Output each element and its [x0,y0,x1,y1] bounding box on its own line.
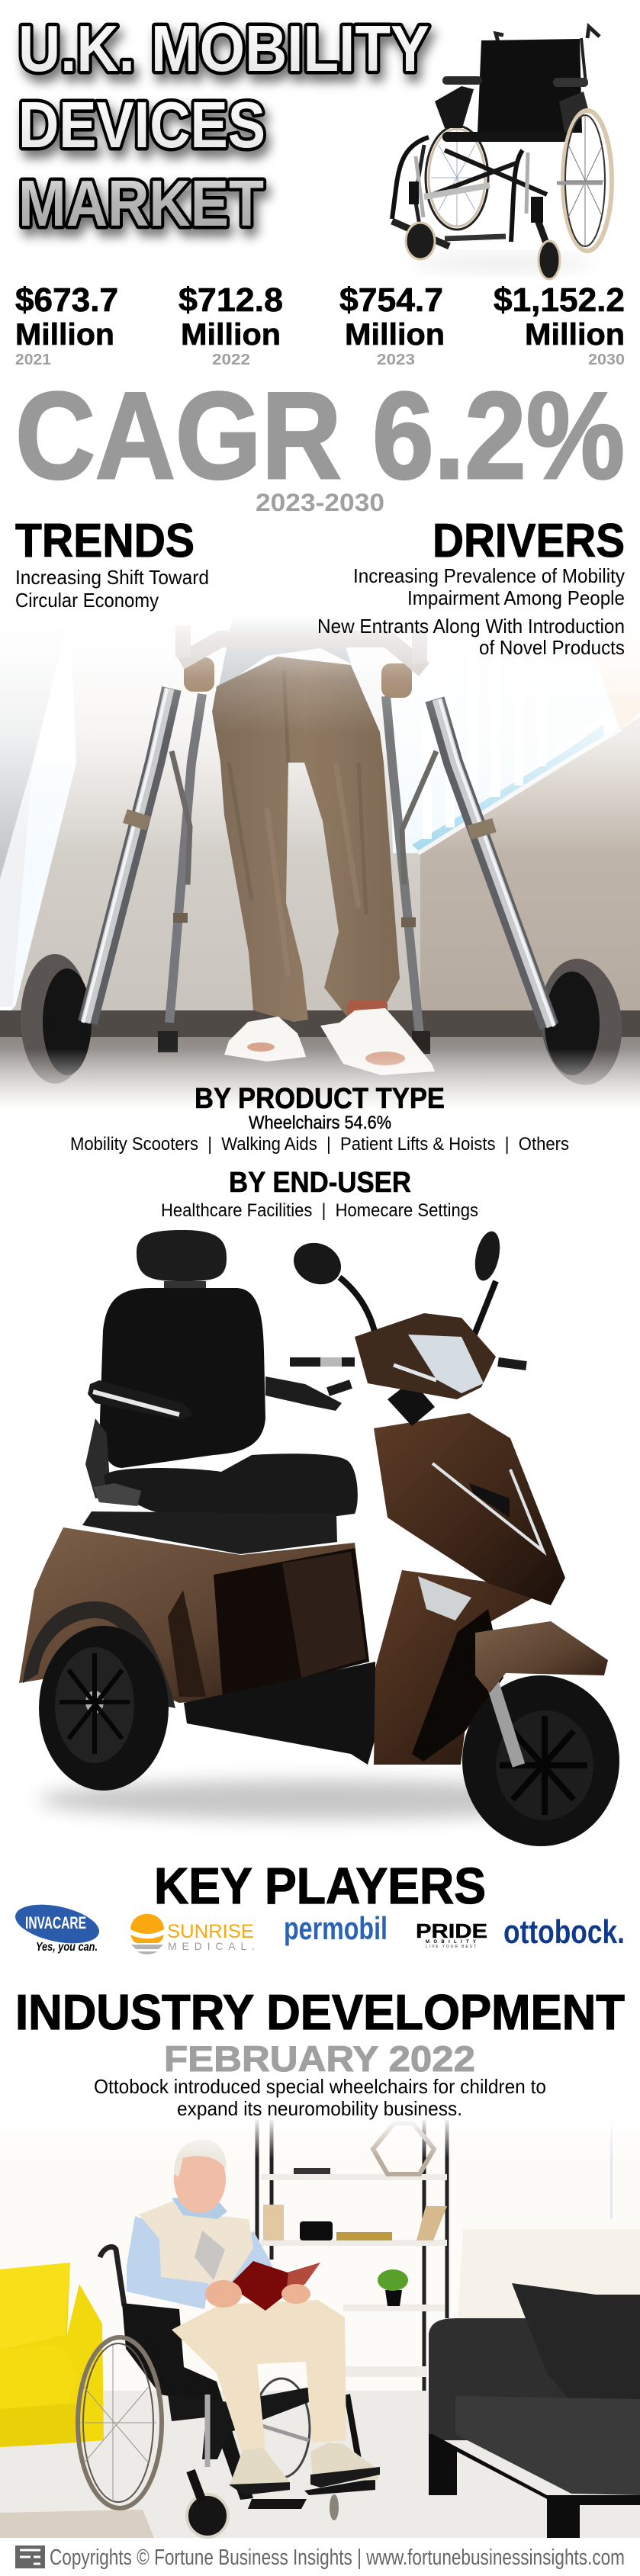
man [127,2140,380,2495]
shirt [217,616,351,690]
heading: key players: KEY PLAYERS [154,1858,486,1915]
development text: Ottobock introduced special wheelchairs for children to [94,2075,546,2098]
logo: invacare: Yes, you can. [36,1941,98,1954]
development text: expand its neuromobility business. [177,2097,462,2120]
front legs [88,689,172,1023]
drivers text: Increasing Prevalence of Mobility [353,564,625,587]
bottom fade [0,1049,640,1113]
wall left [11,616,427,1010]
logo: permobil: permobil [284,1910,388,1946]
floor [0,1037,640,1110]
trends text [15,566,209,612]
title: DEVICES [18,89,265,162]
drivers text [317,564,625,659]
logo: sunrise medical: MEDICAL. [168,1940,255,1952]
scooter leg shield [374,1570,547,1765]
market value 2030: $1,152.2 [494,281,625,319]
floor [0,2391,640,2538]
logo: invacare: INVACARE [25,1913,86,1932]
market value 2023: 2023 [377,352,415,368]
market value 2023: $754.7 [339,281,443,319]
market value 2022: $712.8 [178,281,283,319]
black sofa [429,2283,640,2538]
market value 2022: 2022 [212,352,250,368]
drivers text: of Novel Products [479,636,625,659]
trousers [212,657,400,1022]
scooter front wheel [462,1675,619,1846]
shelving unit [257,2120,447,2391]
title: MARKET [18,168,264,240]
wheel right [535,955,628,1089]
logo: pride mobility [416,1919,487,1949]
scooter front fender [475,1621,608,1693]
subject top fade [0,616,640,732]
development text [94,2075,546,2120]
drivers text: Impairment Among People [407,586,625,609]
window [385,616,640,853]
sock and slippers [347,1001,388,1017]
market value 2030 [494,281,625,368]
footer logo [15,2545,45,2568]
scooter rear body [19,1527,369,1703]
market value 2023 [339,281,445,368]
title: U.K. MOBILITY [18,13,429,85]
heading: drivers: DRIVERS [433,515,625,567]
heading: trends: TRENDS [15,515,195,567]
market value 2021 [15,281,118,368]
market value 2021: 2021 [15,352,51,368]
logo: pride mobility: MOBILITY [426,1940,476,1945]
wheel left [21,954,89,1084]
logo: sunrise medical [130,1914,255,1954]
wheelchair [78,2247,375,2537]
market value 2030: 2030 [588,352,625,368]
market value 2021: Million [15,318,114,352]
drivers text: New Entrants Along With Introduction [317,615,625,638]
hands [184,657,214,692]
photo: man in wheelchair [0,2117,640,2538]
footer [15,2545,625,2570]
book [229,2261,320,2311]
heading: by end-user: BY END-USER [229,1167,411,1199]
logo: pride mobility: PRIDE [416,1919,487,1942]
CAGR period: 2023-2030 [256,489,384,516]
photo: walker and legs [0,616,640,1113]
trends text: Circular Economy [15,589,159,612]
title [18,13,429,240]
scooter mirrors [287,1229,504,1335]
heading: by product type: BY PRODUCT TYPE [195,1083,445,1115]
scooter headlight [355,1313,496,1426]
rug [0,2510,154,2538]
walker top bar [180,639,424,670]
icon: mobility scooter [19,1229,619,1846]
heading: industry development: INDUSTRY DEVELOPMENT [15,1984,625,2040]
scooter seat [85,1230,358,1526]
baseboard [0,1010,640,1038]
scooter side lamp [418,1576,471,1620]
market value 2030: Million [525,318,625,352]
yellow armchair [0,2263,104,2447]
market value 2021: $673.7 [15,281,118,319]
market value 2023: Million [345,318,445,352]
icon: wheelchair [392,27,612,279]
market value 2022: Million [181,318,281,352]
scooter front shield [374,1413,565,1605]
development date: FEBRUARY 2022 [164,2038,475,2079]
trends text: Increasing Shift Toward [15,566,209,589]
product list: Mobility Scooters | Walking Aids | Patient Lifts & Hoists | Others [70,1134,569,1155]
scooter handlebar [290,1362,526,1392]
logo: invacare [11,1898,103,1954]
logo: sunrise medical: SUNRISE [167,1921,254,1942]
end-user list: Healthcare Facilities | Homecare Settings [161,1200,478,1221]
wall right [420,717,640,1010]
wall top fade [0,616,640,854]
market value 2022 [178,281,283,368]
logo: pride mobility: LIVE YOUR BEST [426,1945,476,1949]
scooter footboard [184,1662,375,1765]
scooter rear wheel [39,1626,169,1791]
rear legs and braces [169,694,202,1023]
leading product share: Wheelchairs 54.6% [249,1113,391,1133]
cabinet [458,2229,640,2318]
